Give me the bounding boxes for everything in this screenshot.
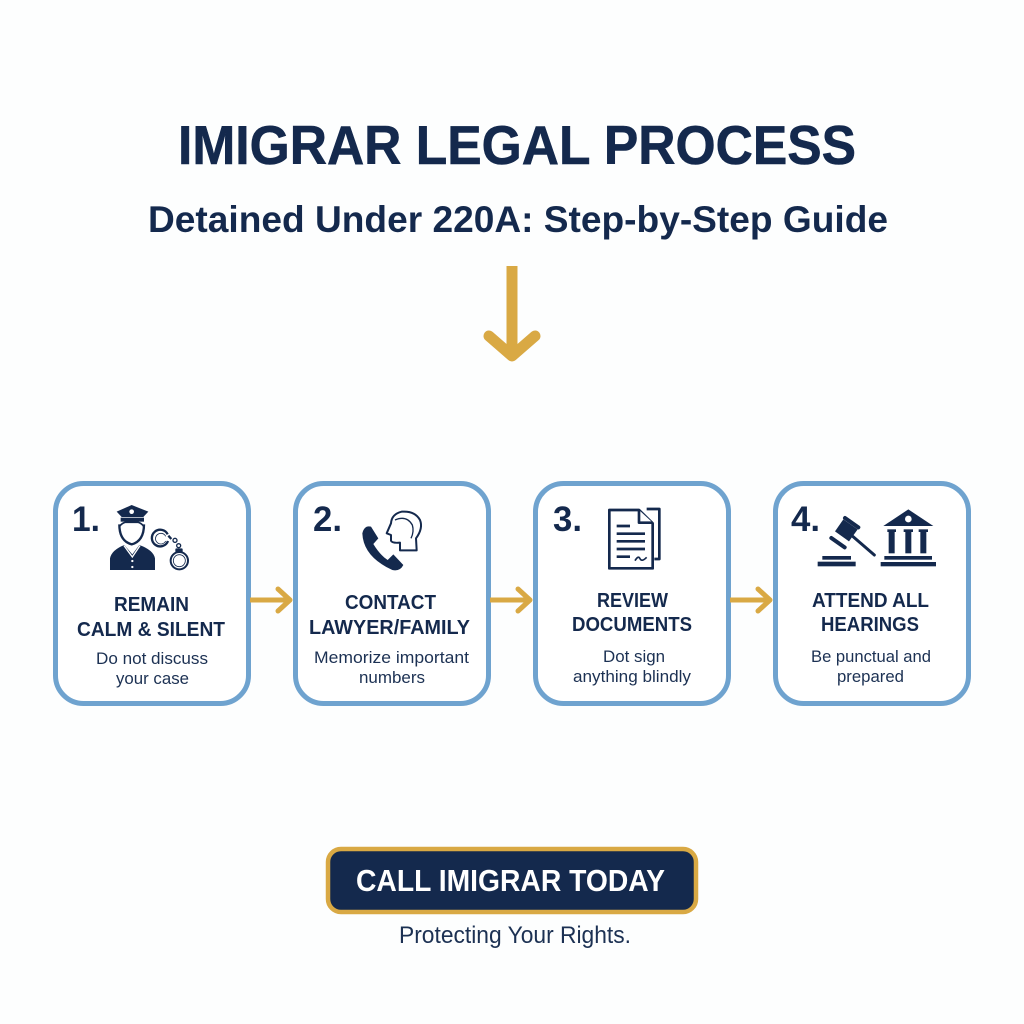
step 1 heading xyxy=(77,594,225,641)
step 3 description: Dot sign xyxy=(603,647,665,666)
step 4 description xyxy=(811,647,931,686)
step 4 heading: ATTEND ALL xyxy=(812,590,929,612)
arrow: step 2 to 3 xyxy=(490,589,530,611)
step 1 description: your case xyxy=(116,669,189,688)
step 1 heading: CALM & SILENT xyxy=(77,619,225,641)
panel: step 2 xyxy=(296,484,488,704)
step 3 heading: DOCUMENTS xyxy=(572,614,692,636)
subtitle: Detained Under 220A: Step-by-Step Guide xyxy=(148,199,888,240)
step 2 heading: CONTACT xyxy=(345,592,436,614)
panel: step 3 xyxy=(536,484,728,704)
panel: step 4 xyxy=(776,484,968,704)
call to action button: CALL IMIGRAR TODAY xyxy=(356,863,665,898)
step 4 heading: HEARINGS xyxy=(821,614,919,636)
step 3 heading xyxy=(572,590,692,636)
panel: step 1 xyxy=(56,484,248,704)
step 2 description xyxy=(314,648,469,687)
step 4 heading xyxy=(812,590,929,636)
tagline: Protecting Your Rights. xyxy=(399,922,631,949)
step number 1: 1. xyxy=(72,500,100,539)
step 4 description: prepared xyxy=(837,667,904,686)
step 1 description xyxy=(96,649,208,688)
step 3 description: anything blindly xyxy=(573,667,691,686)
step number 3: 3. xyxy=(553,500,582,539)
step 2 description: numbers xyxy=(359,668,425,687)
step 3 heading: REVIEW xyxy=(597,590,668,612)
step 1 description: Do not discuss xyxy=(96,649,208,668)
call to action button xyxy=(328,849,696,912)
step 2 heading xyxy=(309,592,471,639)
icon: officer and handcuffs xyxy=(110,505,188,570)
icon: phone and head xyxy=(362,512,421,570)
icon: gavel and courthouse xyxy=(818,509,936,566)
step number 2: 2. xyxy=(313,500,342,539)
step 3 description xyxy=(573,647,691,686)
arrow: large down arrow xyxy=(489,266,535,356)
arrow: step 3 to 4 xyxy=(730,589,770,611)
arrow: step 1 to 2 xyxy=(250,589,290,611)
step number 4: 4. xyxy=(791,500,820,539)
step 4 description: Be punctual and xyxy=(811,647,931,666)
icon: document xyxy=(609,509,659,568)
step 1 heading: REMAIN xyxy=(114,594,189,616)
step 2 description: Memorize important xyxy=(314,648,469,667)
title: IMIGRAR LEGAL PROCESS xyxy=(178,114,856,176)
step 2 heading: LAWYER/FAMILY xyxy=(309,617,471,639)
